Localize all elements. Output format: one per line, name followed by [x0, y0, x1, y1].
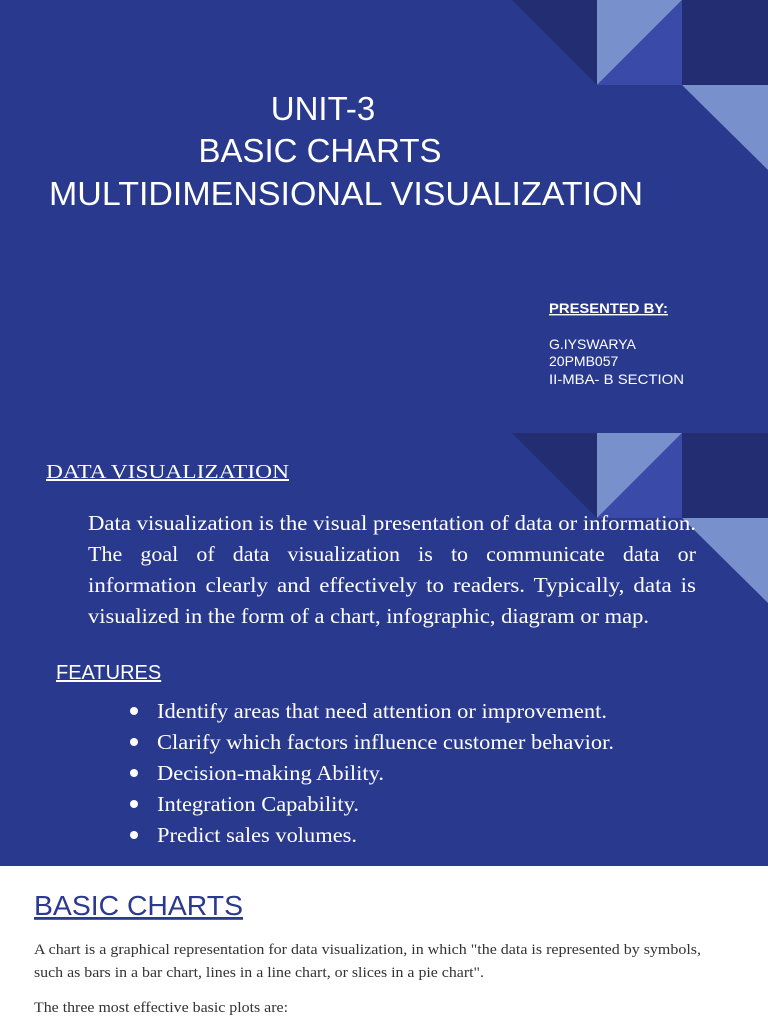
text block: definition: Data visualization is the visual presentation of data or information. — [88, 511, 696, 535]
presenter info: 20PMB057 — [549, 353, 618, 369]
decorative corner shapes — [512, 0, 768, 170]
text block: chart definition: such as bars in a bar chart, lines in a line chart, or slices in a pie chart". — [34, 965, 484, 981]
text block: chart definition: The three most effective basic plots are: — [34, 1000, 288, 1016]
title: MULTIDIMENSIONAL VISUALIZATION — [49, 175, 643, 212]
title: BASIC CHARTS — [198, 132, 442, 169]
bullet list: features — [130, 699, 614, 847]
bullet list: features: Identify areas that need attention or improvement. — [157, 699, 607, 723]
decorative corner shapes — [512, 433, 768, 603]
bullet list: features: Predict sales volumes. — [157, 823, 357, 847]
presenter info — [549, 300, 684, 387]
text block: definition: information clearly and effectively to readers. Typically, data is — [88, 573, 696, 597]
text block: definition: visualized in the form of a chart, infographic, diagram or map. — [88, 604, 649, 628]
heading: features: FEATURES — [56, 662, 161, 684]
text block: definition: The goal of data visualization is to communicate data or — [88, 542, 696, 566]
panel: title slide — [0, 0, 768, 433]
panel: data visualization slide — [0, 433, 768, 866]
presenter info: G.IYSWARYA — [549, 336, 637, 352]
presenter info: II-MBA- B SECTION — [549, 371, 684, 387]
bullet list: features: Clarify which factors influence customer behavior. — [157, 730, 614, 754]
title: UNIT-3 — [271, 90, 375, 127]
title — [49, 90, 643, 212]
panel: basic charts slide — [0, 866, 768, 1024]
bullet list: features: Decision-making Ability. — [157, 761, 384, 785]
heading: data visualization: DATA VISUALIZATION — [46, 461, 289, 483]
text block: definition — [88, 511, 696, 628]
presenter info: PRESENTED BY: — [549, 300, 668, 316]
text block: chart definition — [34, 942, 701, 1016]
text block: chart definition: A chart is a graphical representation for data visualization, in which "the data is represented by symbols, — [34, 942, 701, 958]
bullet list: features: Integration Capability. — [157, 792, 359, 816]
heading: basic charts: BASIC CHARTS — [34, 890, 243, 921]
